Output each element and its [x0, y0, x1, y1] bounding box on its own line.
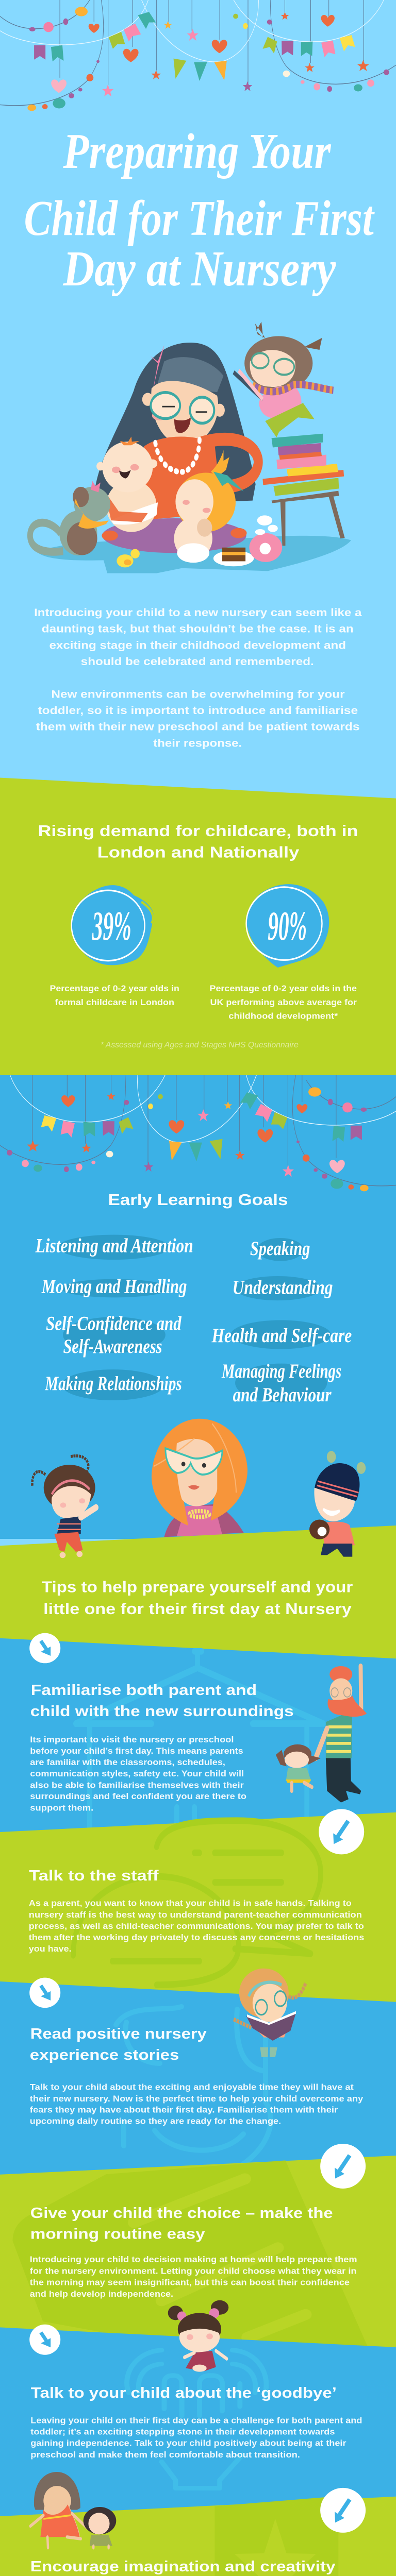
heading: child with the new surroundings	[30, 1703, 294, 1720]
mother	[95, 343, 258, 553]
goals list: Self-Confidence and	[46, 1313, 182, 1334]
duck	[117, 549, 140, 567]
illustration: girl reading a book	[234, 1969, 306, 2057]
intro text: toddler, so it is important to introduce and familiarise	[38, 705, 358, 717]
body text: the morning may seem insignificant, but this can boost their confidence	[30, 2278, 350, 2287]
watermark icon: tag	[12, 2160, 369, 2349]
goals list: and Behaviour	[233, 1384, 332, 1406]
heading	[42, 1578, 353, 1618]
goals list: Self-Awareness	[63, 1335, 162, 1358]
stat: 90%	[246, 884, 329, 968]
heading	[30, 2026, 207, 2063]
intro text	[34, 607, 362, 749]
body text: As a parent, you want to know that your child is in safe hands. Talking to	[29, 1899, 352, 1908]
illustration: mother and daughter holding hands	[30, 2472, 116, 2548]
body text: preschool and make them feel comfortable about transition.	[30, 2450, 300, 2460]
intro text: Introducing your child to a new nursery can seem like a	[34, 607, 362, 619]
intro text: daunting task, but that shouldn’t be the case. It is an	[42, 623, 354, 635]
watermark icon: house	[76, 1651, 323, 1827]
heading: Read positive nursery	[30, 2026, 207, 2042]
stat label right: childhood development*	[228, 1011, 338, 1021]
body text: process, as well as child-teacher communications. You may prefer to talk to	[29, 1922, 364, 1931]
arrow badge 3	[29, 1978, 60, 2008]
body text: Leaving your child on their first day can be a challenge for both parent and	[30, 2416, 362, 2425]
goals list: Understanding	[233, 1276, 333, 1298]
illustration: girl with pigtails dancing	[32, 1456, 96, 1558]
watermark icon: ribbon and star	[214, 2496, 338, 2576]
footnote: * Assessed using Ages and Stages NHS Questionnaire	[101, 1041, 299, 1049]
body text: upcoming daily routine so they are ready for the change.	[30, 2117, 281, 2126]
body text: for the nursery environment. Letting your child choose what they wear in	[30, 2267, 357, 2276]
baby left	[96, 436, 158, 532]
bunting decoration top	[0, 0, 396, 111]
heading: Familiarise both parent and	[31, 1682, 257, 1699]
heading: Encourage imagination and creativity	[30, 2558, 336, 2575]
goals list: Listening and Attention	[35, 1234, 193, 1257]
panel: talk to the staff	[0, 1812, 396, 2009]
hero illustration: mother with children, cat and books	[30, 321, 351, 573]
stat label left	[50, 984, 179, 1007]
arrow badge 1	[29, 1633, 60, 1663]
heading: Tips to help prepare yourself and your	[42, 1578, 353, 1596]
arrow badge 5	[29, 2325, 60, 2355]
girl with scissors	[234, 321, 334, 437]
goals list: Health and Self-care	[211, 1325, 352, 1347]
body text: surroundings and feel confident you are there to	[30, 1792, 246, 1801]
daughter	[276, 1744, 321, 1791]
body text	[30, 2416, 362, 2460]
stat values: 90%	[268, 904, 307, 949]
watermark icon: chat bubbles	[73, 1821, 321, 1985]
body text: Introducing your child to decision making at home will help prepare them	[30, 2255, 357, 2264]
heading	[30, 2205, 333, 2242]
goals list: Managing Feelings	[221, 1360, 341, 1382]
goals list: Speaking	[250, 1238, 310, 1260]
baby right	[174, 450, 244, 563]
goal highlight blobs	[58, 1235, 331, 1402]
panel: early learning goals	[0, 1070, 396, 1539]
goals list: Making Relationships	[44, 1372, 182, 1395]
body text: and help develop independence.	[30, 2290, 173, 2299]
panel: familiarise both parent and child	[0, 1638, 396, 1839]
stat values	[92, 904, 307, 949]
cat	[30, 481, 110, 555]
body text	[30, 2083, 364, 2126]
illustration: boy with bear hat and teddy	[309, 1451, 366, 1557]
title	[24, 124, 375, 297]
panel: encourage imagination and creativity	[0, 2496, 396, 2576]
body text: you have.	[29, 1944, 72, 1954]
panel: read positive nursery experience stories	[0, 1981, 396, 2184]
panel: give your child the choice	[0, 2156, 396, 2354]
body text: Its important to visit the nursery or preschool	[30, 1735, 234, 1744]
illustration: teacher with orange hair	[152, 1419, 248, 1537]
intro text: exciting stage in their childhood development and	[50, 640, 346, 651]
panel: talk to your child about the goodbye	[0, 2327, 396, 2524]
stat label right	[209, 984, 357, 1021]
stat label left: formal childcare in London	[55, 997, 174, 1007]
panel: tips intro	[0, 1526, 396, 1664]
goals list: Moving and Handling	[41, 1276, 187, 1297]
watermark icon: light bulb	[127, 2350, 266, 2488]
heading: little one for their first day at Nursery	[43, 1600, 352, 1618]
tea cup and cake	[213, 515, 282, 566]
heading	[30, 1682, 294, 1720]
heading: Give your child the choice – make the	[30, 2205, 333, 2222]
body text: nursery staff is the best way to understand parent-teacher communication	[29, 1910, 362, 1920]
stat label left: Percentage of 0-2 year olds in	[50, 984, 179, 993]
title: Preparing Your	[63, 124, 331, 179]
body text	[30, 1735, 246, 1813]
body text: Talk to your child about the exciting and enjoyable time they will have at	[30, 2083, 354, 2092]
heading	[38, 822, 358, 861]
heading: London and Nationally	[97, 843, 300, 861]
intro text: them with their new preschool and be patient towards	[36, 721, 360, 733]
intro text: their response.	[153, 738, 242, 749]
panel: rising demand for childcare	[0, 778, 396, 1082]
body text: also be able to familiarise themselves with their	[30, 1781, 244, 1790]
body text: gaining independence. Talk to your child positively about being at their	[30, 2439, 346, 2448]
panel: hero background	[0, 0, 396, 824]
heading: experience stories	[30, 2047, 179, 2063]
body text: them after the working day privately to discuss any concerns or hesitations	[29, 1933, 364, 1942]
watermark icon: story	[116, 2007, 271, 2164]
heading: morning routine easy	[30, 2226, 205, 2242]
arrow badge 4	[320, 2144, 366, 2189]
heading: Rising demand for childcare, both in	[38, 822, 358, 840]
stat label right: Percentage of 0-2 year olds in the	[209, 984, 357, 993]
illustration: father holding daughter's hand	[276, 1666, 367, 1803]
stat label right: UK performing above average for	[210, 997, 357, 1007]
body text	[29, 1899, 364, 1954]
stack of books on stool	[262, 434, 345, 546]
heading: Early Learning Goals	[108, 1191, 288, 1209]
body text	[30, 2255, 357, 2299]
intro text: should be celebrated and remembered.	[81, 656, 314, 668]
goals list	[35, 1234, 352, 1406]
body text: toddler; it’s an exciting stepping stone in their development towards	[30, 2428, 335, 2437]
heading: Talk to the staff	[29, 1868, 159, 1884]
body text: communication styles, safety etc. Your child will	[30, 1769, 244, 1778]
title: Day at Nursery	[63, 241, 336, 297]
arrow badge 6	[320, 2488, 366, 2533]
body text: are familiar with the classrooms, schedules,	[30, 1758, 225, 1767]
stat values: 39%	[92, 904, 131, 949]
illustration: toddler with pink flowers in hair	[168, 2300, 228, 2372]
bunting decoration mirrored	[0, 1070, 396, 1191]
heading: Talk to your child about the ‘goodbye’	[31, 2385, 337, 2401]
body text: fears they may have about their first day. Familiarise them with their	[30, 2106, 338, 2115]
body text: before your child’s first day. This means parents	[30, 1747, 243, 1756]
stat: 39%	[72, 885, 154, 965]
intro text: New environments can be overwhelming for your	[51, 688, 345, 701]
body text: support them.	[30, 1804, 93, 1813]
arrow badge 2	[319, 1809, 364, 1854]
body text: their new nursery. Now is the perfect time to help your child overcome any	[30, 2094, 364, 2104]
